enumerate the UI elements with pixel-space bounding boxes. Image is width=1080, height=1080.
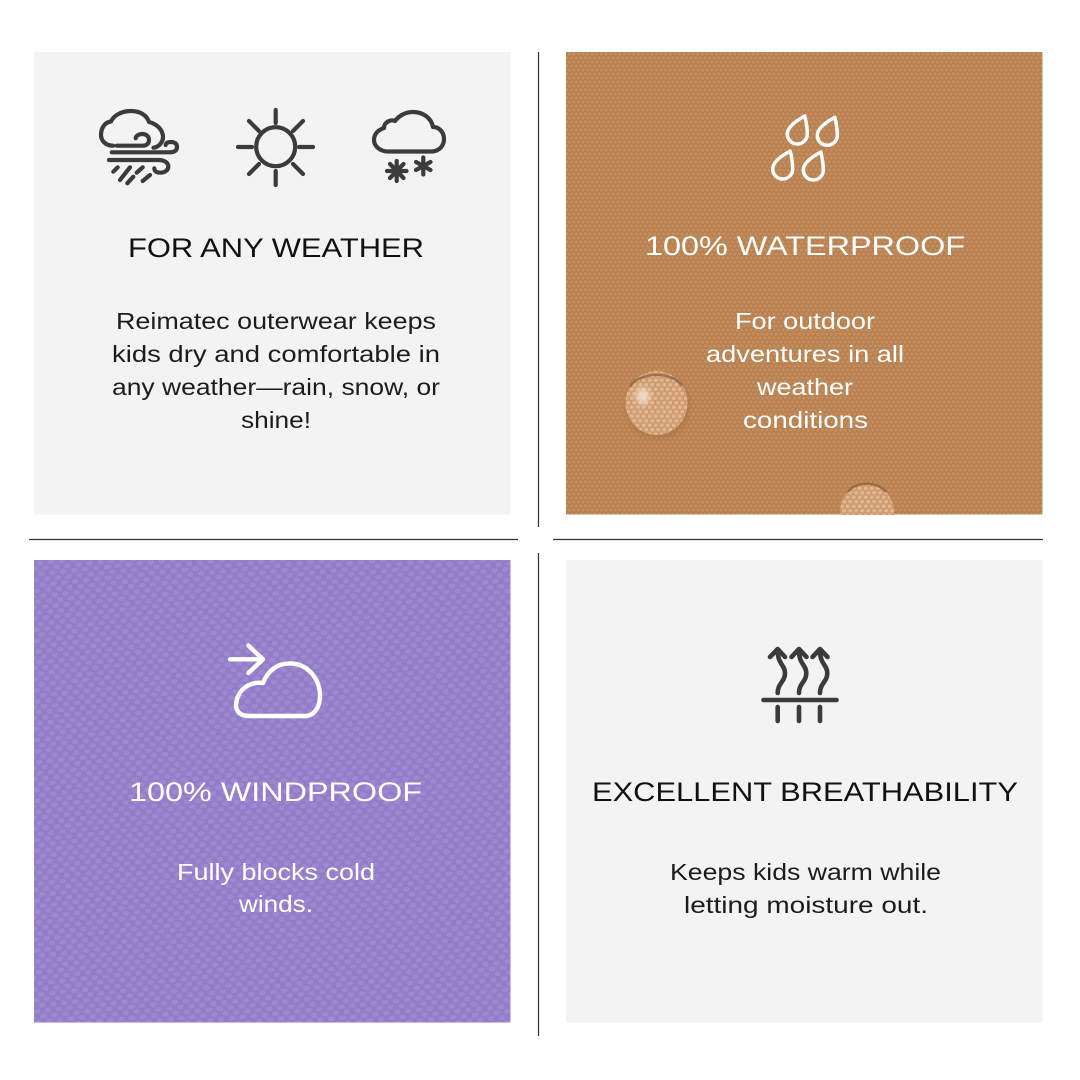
heading: EXCELLENT BREATHABILITY: [592, 777, 1018, 807]
body text: adventures in all: [706, 341, 904, 367]
body text: conditions: [743, 407, 868, 433]
water droplets on fabric: [626, 371, 894, 515]
body text: winds.: [238, 891, 313, 917]
body text: Fully blocks cold: [177, 859, 375, 885]
icon: rain drops: [773, 116, 837, 180]
body text: [670, 859, 941, 918]
icon: arrow and cloud: [230, 646, 320, 716]
body text: any weather—rain, snow, or: [112, 374, 440, 400]
icon: cloud and snow: [374, 112, 444, 181]
icon: sun: [238, 110, 313, 185]
body text: [706, 308, 904, 433]
body text: Keeps kids warm while: [670, 859, 941, 885]
body text: For outdoor: [735, 308, 875, 334]
panel: windproof: [34, 560, 510, 1022]
panel: waterproof: [566, 52, 1042, 540]
heading: 100% WATERPROOF: [645, 231, 965, 261]
body text: kids dry and comfortable in: [112, 341, 440, 367]
body text: shine!: [241, 407, 311, 433]
body text: weather: [756, 374, 853, 400]
panel: breathability: [566, 560, 1042, 1022]
panel: for any weather: [34, 52, 510, 514]
heading: FOR ANY WEATHER: [128, 233, 424, 263]
body text: [177, 859, 375, 917]
icon: wind, cloud and rain: [101, 111, 177, 183]
body text: Reimatec outerwear keeps: [116, 308, 436, 334]
body text: letting moisture out.: [684, 892, 928, 918]
icon: vapour rising through membrane: [764, 649, 836, 721]
body text: [112, 308, 440, 433]
heading: 100% WINDPROOF: [129, 777, 422, 807]
